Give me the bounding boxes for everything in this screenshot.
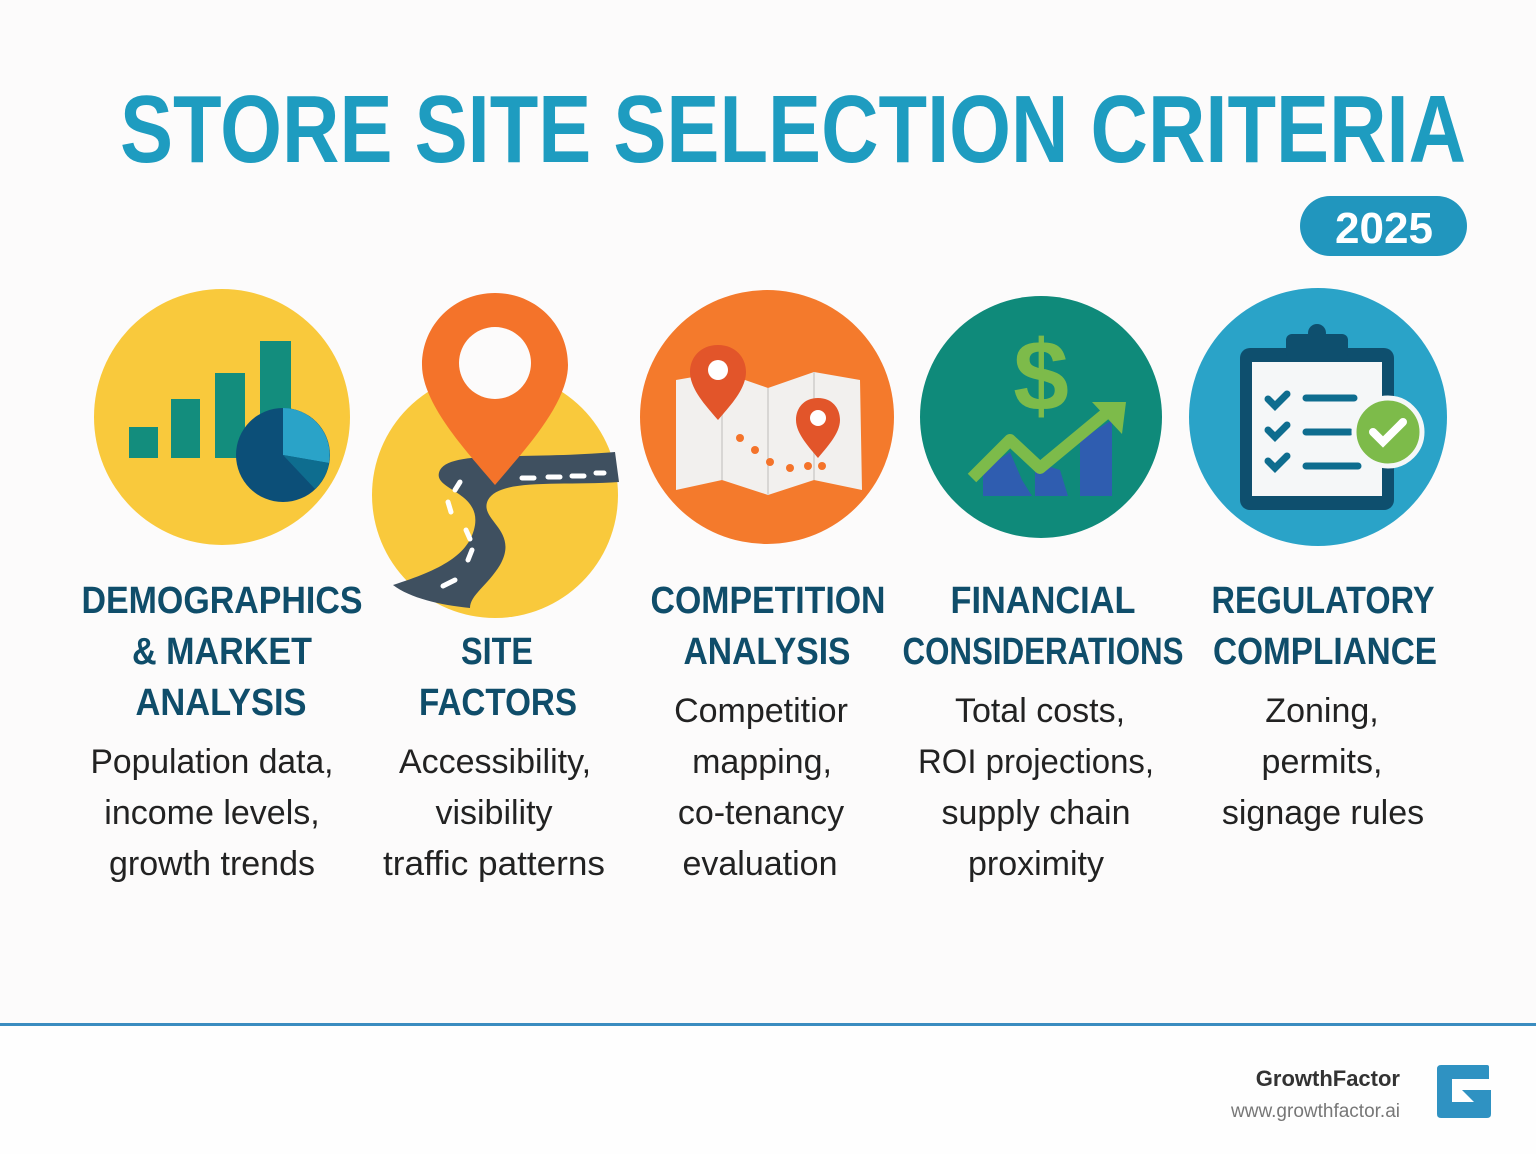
text: financial: proximity bbox=[968, 845, 1104, 883]
icon: bar chart and pie bbox=[94, 289, 350, 545]
text: demographics bbox=[90, 743, 334, 883]
heading: financial: FINANCIAL bbox=[950, 580, 1136, 622]
panel: regulatory bbox=[1189, 288, 1447, 832]
heading: site factors: SITE bbox=[461, 631, 533, 673]
icon: dollar and trend: $ bbox=[1013, 320, 1069, 432]
heading: demographics: DEMOGRAPHICS bbox=[82, 580, 362, 622]
panel: competition bbox=[640, 290, 894, 883]
text: demographics: Population data, bbox=[90, 743, 334, 781]
icon: pin and road bbox=[372, 293, 619, 618]
footer brand: www.growthfactor.ai bbox=[1230, 1101, 1400, 1122]
icon: clipboard checklist bbox=[1189, 288, 1447, 546]
heading: demographics: ANALYSIS bbox=[136, 682, 306, 724]
footer brand: GrowthFactor bbox=[1256, 1066, 1400, 1091]
heading: regulatory bbox=[1212, 580, 1437, 673]
panel: demographics bbox=[82, 289, 362, 883]
heading: regulatory: REGULATORY bbox=[1212, 580, 1434, 622]
year badge bbox=[1300, 196, 1467, 256]
panel: site factors bbox=[372, 293, 619, 883]
text: regulatory: permits, bbox=[1262, 743, 1382, 781]
text: regulatory: Zoning, bbox=[1265, 692, 1379, 730]
text: competition: Competitior bbox=[674, 692, 848, 730]
heading: competition: ANALYSIS bbox=[684, 631, 850, 673]
text: demographics: growth trends bbox=[109, 845, 315, 883]
heading: demographics bbox=[82, 580, 362, 724]
heading: site factors bbox=[419, 631, 577, 724]
text: competition: evaluation bbox=[682, 845, 838, 883]
icon: logo bbox=[1437, 1065, 1491, 1118]
text: site factors: traffic patterns bbox=[383, 845, 605, 883]
text: financial bbox=[918, 692, 1154, 883]
text: competition bbox=[674, 692, 848, 883]
icon: dollar and trend bbox=[920, 296, 1162, 538]
text: site factors: visibility bbox=[435, 794, 553, 832]
heading: site factors: FACTORS bbox=[419, 682, 577, 724]
icon: map with pins bbox=[640, 290, 894, 544]
text: regulatory bbox=[1222, 692, 1424, 832]
text: financial: ROI projections, bbox=[918, 743, 1154, 781]
text: site factors bbox=[383, 743, 605, 883]
text: site factors: Accessibility, bbox=[399, 743, 591, 781]
text: demographics: income levels, bbox=[104, 794, 320, 832]
text: financial: supply chain bbox=[941, 794, 1131, 832]
heading: competition: COMPETITION bbox=[650, 580, 886, 622]
year badge: 2025 bbox=[1335, 204, 1433, 253]
text: financial: Total costs, bbox=[955, 692, 1125, 730]
heading: regulatory: COMPLIANCE bbox=[1213, 631, 1437, 673]
heading: financial bbox=[902, 580, 1184, 673]
heading: competition bbox=[650, 580, 886, 673]
footer brand bbox=[1230, 1065, 1491, 1122]
panel: financial bbox=[902, 296, 1184, 883]
heading: demographics: & MARKET bbox=[132, 631, 312, 673]
text: competition: co-tenancy bbox=[678, 794, 844, 832]
text: regulatory: signage rules bbox=[1222, 794, 1424, 832]
heading: financial: CONSIDERATIONS bbox=[902, 631, 1184, 673]
text: competition: mapping, bbox=[692, 743, 832, 781]
